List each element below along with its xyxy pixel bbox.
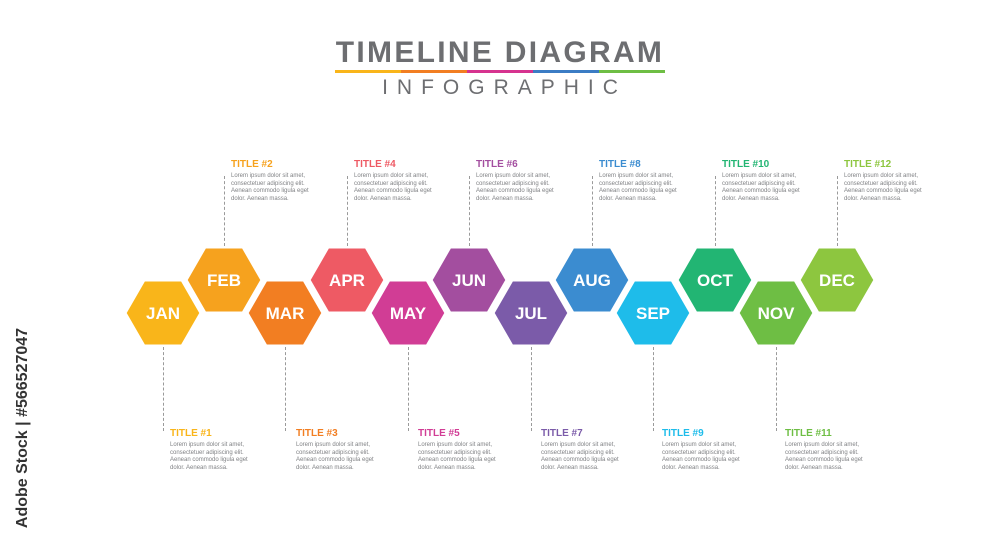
text block: title 12: consectetuer adipiscing elit. bbox=[844, 181, 918, 187]
text block: title 6: dolor. Aenean massa. bbox=[476, 196, 534, 202]
text block: title 6 bbox=[476, 159, 554, 202]
hex: OCT: OCT bbox=[697, 271, 734, 290]
text block: title 12: TITLE #12 bbox=[844, 159, 891, 170]
text block: title 12: Lorem ipsum dolor sit amet, bbox=[844, 173, 918, 179]
text block: title 6: TITLE #6 bbox=[476, 159, 518, 170]
text block: title 6: consectetuer adipiscing elit. bbox=[476, 181, 550, 187]
text block: title 1: TITLE #1 bbox=[170, 428, 212, 439]
hex: JAN: JAN bbox=[146, 304, 180, 323]
hex: MAY bbox=[370, 280, 446, 346]
text block: title 3: Lorem ipsum dolor sit amet, bbox=[296, 442, 370, 448]
hex: AUG bbox=[554, 247, 630, 313]
text block: title 4: dolor. Aenean massa. bbox=[354, 196, 412, 202]
text block: title 4 bbox=[354, 159, 432, 202]
hex: APR: APR bbox=[329, 271, 365, 290]
text block: title 2 bbox=[231, 159, 309, 202]
text block: title 3: TITLE #3 bbox=[296, 428, 338, 439]
text block: title 1 bbox=[170, 428, 248, 471]
text block: title 5: Aenean commodo ligula eget bbox=[418, 457, 496, 463]
text block: title 9: TITLE #9 bbox=[662, 428, 704, 439]
text block: title 4: consectetuer adipiscing elit. bbox=[354, 181, 428, 187]
text block: title 5 bbox=[418, 428, 496, 471]
text block: title 11 bbox=[785, 428, 863, 471]
text block: title 5: TITLE #5 bbox=[418, 428, 460, 439]
hex: MAR: MAR bbox=[266, 304, 304, 323]
text block: title 6: Lorem ipsum dolor sit amet, bbox=[476, 173, 550, 179]
text block: title 12 bbox=[844, 159, 922, 202]
text block: title 11: TITLE #11 bbox=[785, 428, 832, 439]
text block: title 1: consectetuer adipiscing elit. bbox=[170, 450, 244, 456]
text block: title 7: TITLE #7 bbox=[541, 428, 583, 439]
text block: title 11: Lorem ipsum dolor sit amet, bbox=[785, 442, 859, 448]
hex: JAN bbox=[125, 280, 201, 346]
hex: NOV: NOV bbox=[758, 304, 795, 323]
text block: title 4: Aenean commodo ligula eget bbox=[354, 188, 432, 194]
text block: title 8: consectetuer adipiscing elit. bbox=[599, 181, 673, 187]
text block: title 3: consectetuer adipiscing elit. bbox=[296, 450, 370, 456]
text block: title 12: dolor. Aenean massa. bbox=[844, 196, 902, 202]
text block: title 4: TITLE #4 bbox=[354, 159, 396, 170]
text block: title 8: dolor. Aenean massa. bbox=[599, 196, 657, 202]
hex: APR bbox=[309, 247, 385, 313]
hex: NOV bbox=[738, 280, 814, 346]
text block: title 7: Lorem ipsum dolor sit amet, bbox=[541, 442, 615, 448]
hex: FEB bbox=[186, 247, 262, 313]
text block: title 2: consectetuer adipiscing elit. bbox=[231, 181, 305, 187]
text block: title 3: Aenean commodo ligula eget bbox=[296, 457, 374, 463]
text block: title 12: Aenean commodo ligula eget bbox=[844, 188, 922, 194]
text block: title 9: Aenean commodo ligula eget bbox=[662, 457, 740, 463]
text block: title 5: Lorem ipsum dolor sit amet, bbox=[418, 442, 492, 448]
text block: title 7: consectetuer adipiscing elit. bbox=[541, 450, 615, 456]
text block: title 1: dolor. Aenean massa. bbox=[170, 465, 228, 471]
text block: title 4: Lorem ipsum dolor sit amet, bbox=[354, 173, 428, 179]
text block: title 8: Lorem ipsum dolor sit amet, bbox=[599, 173, 673, 179]
text block: title 5: dolor. Aenean massa. bbox=[418, 465, 476, 471]
text block: title 2: Lorem ipsum dolor sit amet, bbox=[231, 173, 305, 179]
title underline bbox=[335, 70, 665, 73]
hex: SEP: SEP bbox=[636, 304, 670, 323]
subtitle: INFOGRAPHIC bbox=[382, 76, 627, 99]
hex: JUL bbox=[493, 280, 569, 346]
hex: AUG: AUG bbox=[573, 271, 611, 290]
text block: title 10: Aenean commodo ligula eget bbox=[722, 188, 800, 194]
text block: title 2: dolor. Aenean massa. bbox=[231, 196, 289, 202]
hex: SEP bbox=[615, 280, 691, 346]
text block: title 7: Aenean commodo ligula eget bbox=[541, 457, 619, 463]
text block: title 9: dolor. Aenean massa. bbox=[662, 465, 720, 471]
text block: title 1: Aenean commodo ligula eget bbox=[170, 457, 248, 463]
hex: JUN: JUN bbox=[452, 271, 486, 290]
text block: title 10 bbox=[722, 159, 800, 202]
text block: title 7: dolor. Aenean massa. bbox=[541, 465, 599, 471]
hex: DEC bbox=[799, 247, 875, 313]
text block: title 3 bbox=[296, 428, 374, 471]
text block: title 2: TITLE #2 bbox=[231, 159, 273, 170]
hex: MAR bbox=[247, 280, 323, 346]
watermark: Adobe Stock | #566527047 bbox=[14, 328, 31, 528]
text block: title 10: TITLE #10 bbox=[722, 159, 769, 170]
hex: MAY: MAY bbox=[390, 304, 427, 323]
text block: title 11: dolor. Aenean massa. bbox=[785, 465, 843, 471]
text block: title 8: TITLE #8 bbox=[599, 159, 641, 170]
text block: title 5: consectetuer adipiscing elit. bbox=[418, 450, 492, 456]
text block: title 9 bbox=[662, 428, 740, 471]
hex: FEB: FEB bbox=[207, 271, 241, 290]
text block: title 11: consectetuer adipiscing elit. bbox=[785, 450, 859, 456]
title: TIMELINE DIAGRAM bbox=[336, 36, 664, 69]
hex: JUN bbox=[431, 247, 507, 313]
hex: OCT bbox=[677, 247, 753, 313]
text block: title 7 bbox=[541, 428, 619, 471]
text block: title 10: Lorem ipsum dolor sit amet, bbox=[722, 173, 796, 179]
hex: JUL: JUL bbox=[515, 304, 547, 323]
text block: title 8: Aenean commodo ligula eget bbox=[599, 188, 677, 194]
text block: title 8 bbox=[599, 159, 677, 202]
hex: DEC: DEC bbox=[819, 271, 855, 290]
text block: title 9: Lorem ipsum dolor sit amet, bbox=[662, 442, 736, 448]
text block: title 11: Aenean commodo ligula eget bbox=[785, 457, 863, 463]
text block: title 10: consectetuer adipiscing elit. bbox=[722, 181, 796, 187]
text block: title 2: Aenean commodo ligula eget bbox=[231, 188, 309, 194]
text block: title 6: Aenean commodo ligula eget bbox=[476, 188, 554, 194]
text block: title 1: Lorem ipsum dolor sit amet, bbox=[170, 442, 244, 448]
text block: title 9: consectetuer adipiscing elit. bbox=[662, 450, 736, 456]
text block: title 10: dolor. Aenean massa. bbox=[722, 196, 780, 202]
text block: title 3: dolor. Aenean massa. bbox=[296, 465, 354, 471]
